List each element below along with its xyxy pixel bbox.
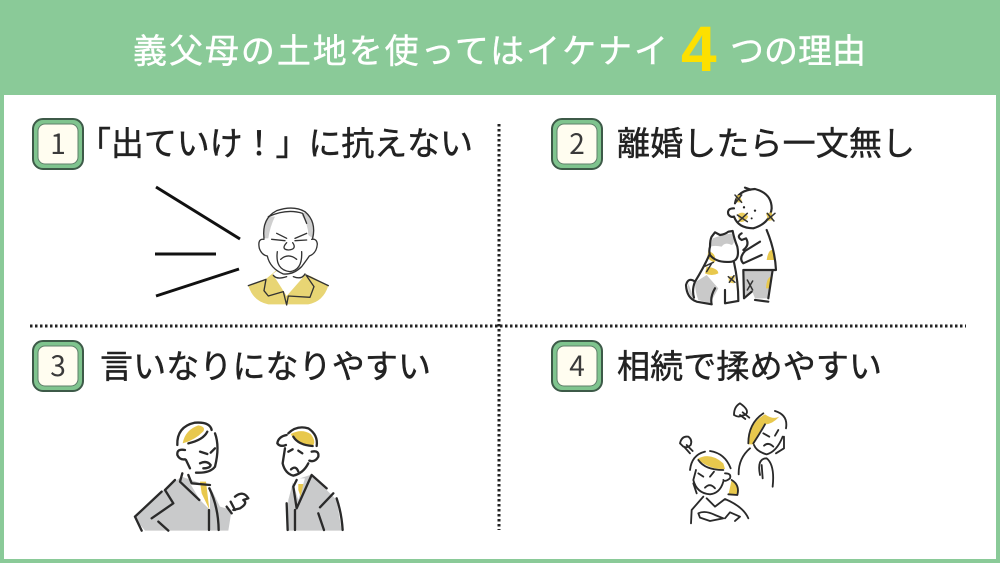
speech lines — [155, 187, 240, 296]
dog — [686, 231, 738, 304]
heading 3: 言いなりになりやすい — [100, 348, 431, 385]
heading 1: 「出ていけ！」に抗えない — [78, 125, 473, 162]
heading 4: 相続で揉めやすい — [617, 348, 882, 385]
icon: angry old man — [248, 208, 328, 305]
panel: reason 4 — [552, 341, 882, 523]
title — [133, 13, 866, 85]
icon: two men in suits — [133, 423, 343, 531]
panel: reason 2 — [552, 119, 915, 304]
panel: reason 1 — [33, 119, 473, 305]
heading 2: 離婚したら一文無し — [617, 125, 915, 162]
number badge 4 — [552, 341, 602, 391]
title: 4 — [681, 13, 717, 85]
title: つの理由 — [730, 33, 866, 71]
number badge 4: 4 — [569, 345, 585, 385]
number badge 3 — [33, 341, 83, 391]
icon: child with dog — [686, 188, 776, 304]
number badge 3: 3 — [50, 345, 66, 385]
panel: reason 3 — [33, 341, 431, 531]
number badge 1: 1 — [50, 123, 66, 163]
number badge 2: 2 — [569, 123, 585, 163]
number badge 1 — [33, 119, 83, 169]
title: 義父母の土地を使ってはイケナイ — [133, 33, 668, 71]
icon: two arguing women — [680, 403, 786, 523]
number badge 2 — [552, 119, 602, 169]
